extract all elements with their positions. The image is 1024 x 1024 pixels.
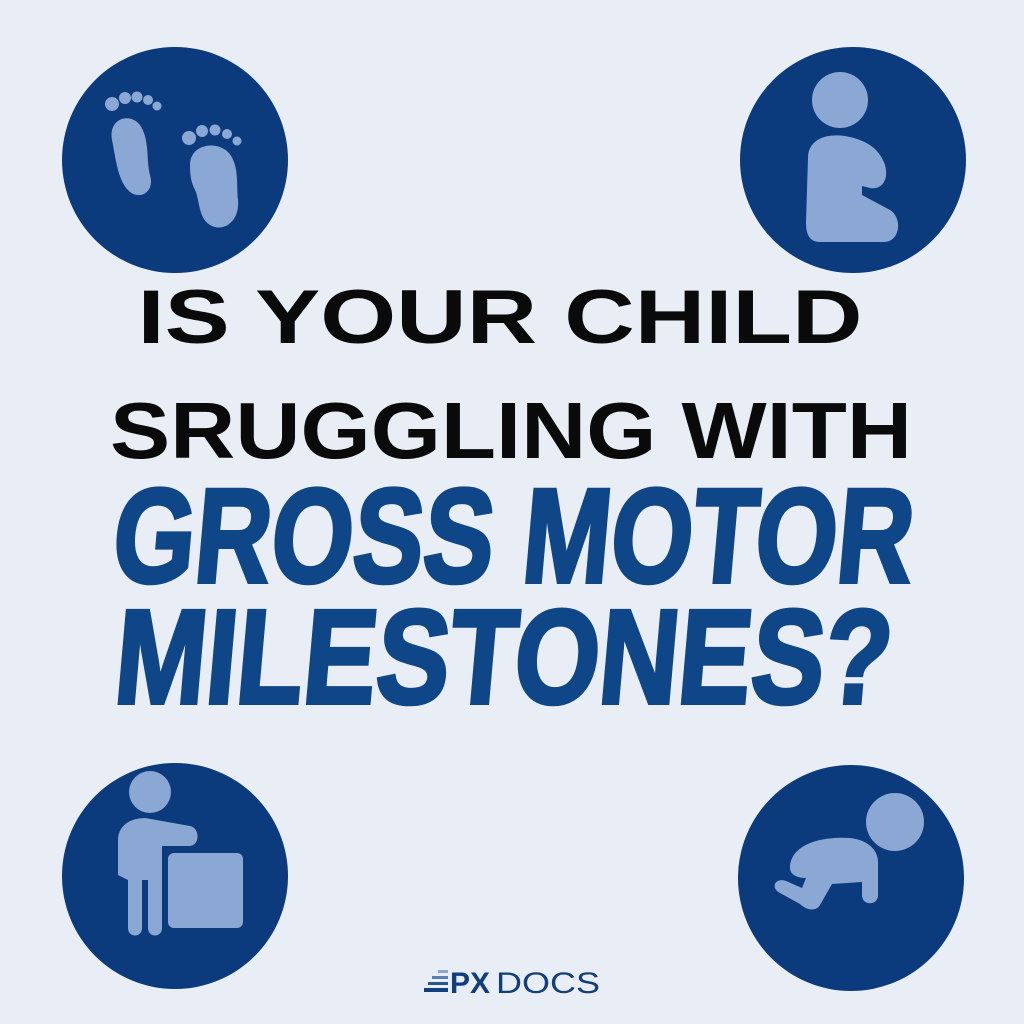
icon: sitting baby circle <box>740 47 966 273</box>
heading line 2: SRUGGLING WITH <box>110 386 912 475</box>
logo: PX <box>450 967 490 1000</box>
icon: crawling baby circle <box>738 765 964 991</box>
icon: child with box circle <box>62 763 288 989</box>
icon: footprints circle <box>62 47 288 273</box>
heading line 1: IS YOUR CHILD <box>138 275 862 360</box>
logo <box>424 967 600 1000</box>
logo: DOCS <box>496 967 600 1000</box>
